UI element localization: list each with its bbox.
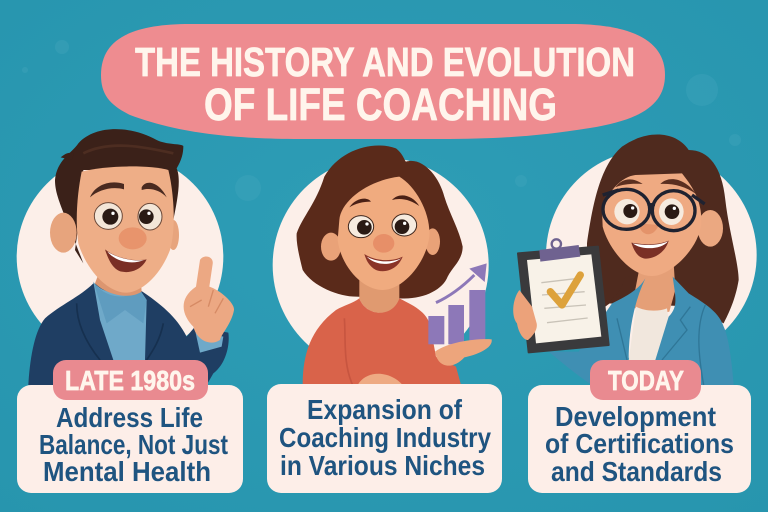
badge: late 1980s <box>53 360 208 400</box>
card: today: of Certifications <box>545 428 734 459</box>
card: expansion: Expansion of <box>307 394 463 425</box>
badge: today: TODAY <box>608 365 684 396</box>
card: late 1980s <box>17 385 243 493</box>
card: expansion: in Various Niches <box>280 450 485 481</box>
card: late 1980s: Balance, Not Just <box>39 429 228 460</box>
badge: late 1980s: LATE 1980s <box>65 365 195 396</box>
title banner: THE HISTORY AND EVOLUTION <box>135 39 635 85</box>
panel: late 1980s character <box>17 129 234 385</box>
icon: glasses <box>603 189 705 231</box>
card: late 1980s: Mental Health <box>43 456 211 487</box>
card: late 1980s: Address Life <box>56 402 203 433</box>
title banner <box>101 24 665 139</box>
card: expansion: Coaching Industry <box>279 422 491 453</box>
title banner: OF LIFE COACHING <box>204 79 557 130</box>
card: today: and Standards <box>551 456 722 487</box>
panel: expansion character <box>273 145 492 385</box>
panel: today character <box>513 135 757 385</box>
icon: clipboard with checkmark <box>518 239 609 352</box>
card: today: Development <box>555 401 716 432</box>
icon: growth chart <box>428 263 487 344</box>
card: expansion <box>267 384 502 493</box>
badge: today <box>590 360 701 400</box>
card: today <box>528 385 751 493</box>
